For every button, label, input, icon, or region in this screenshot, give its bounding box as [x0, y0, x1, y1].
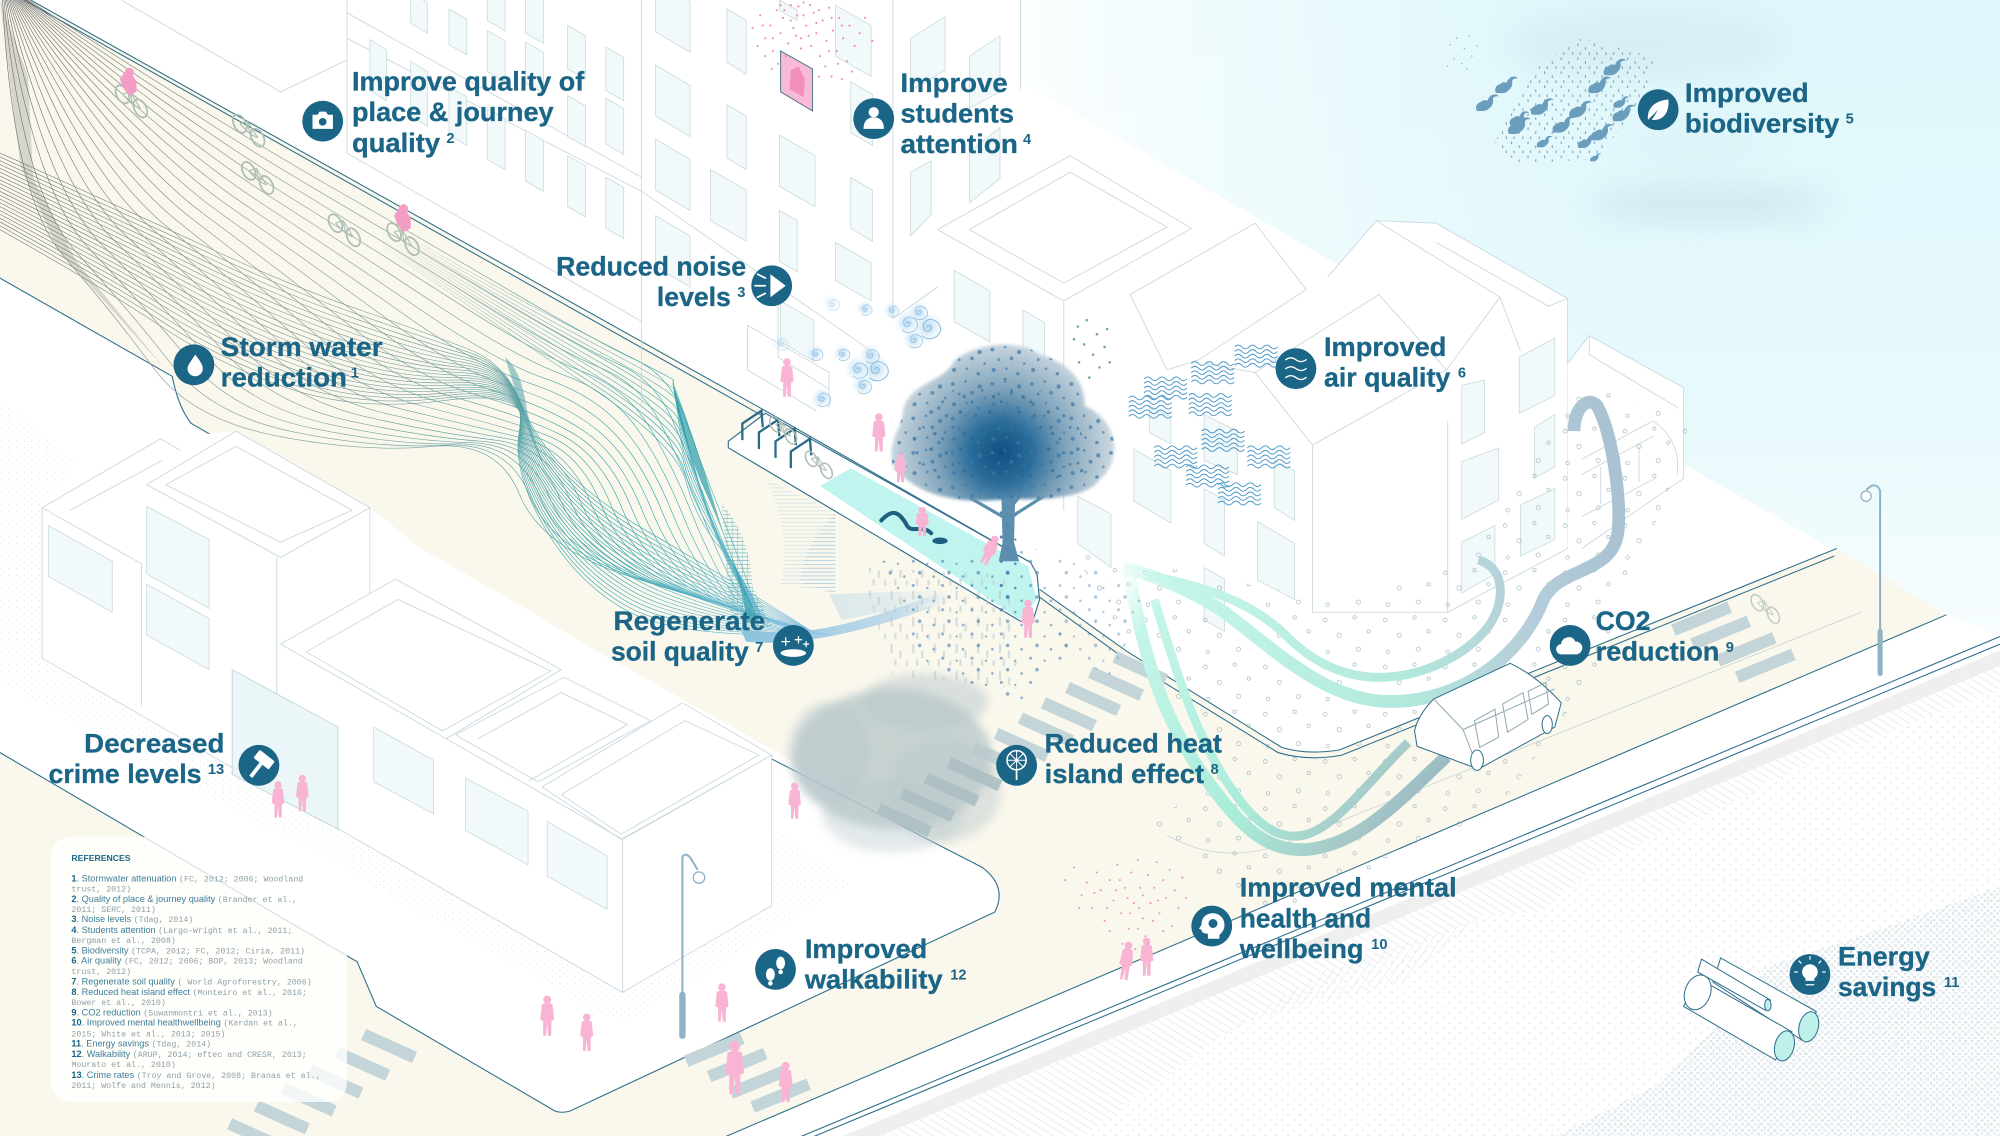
label: regenerate soil quality: 7 — [755, 640, 763, 656]
label: improve quality of place: 2 — [446, 131, 455, 147]
icon: pink student window — [781, 51, 812, 111]
label: decreased crime levels — [48, 729, 279, 789]
tree — [891, 345, 1114, 612]
pedestrian crossings — [203, 607, 1793, 1136]
label: improve students attention: Improve — [901, 68, 1008, 98]
label: improved biodiversity — [1638, 78, 1854, 139]
ring dot scatter around traffic ribbons — [1071, 383, 1696, 912]
label: improved air quality: 6 — [1458, 366, 1466, 382]
tall left building — [121, 0, 1020, 411]
label: regenerate soil quality: Regenerate — [614, 606, 765, 636]
label: storm water reduction: reduction — [221, 362, 347, 392]
label: improve students attention: students — [901, 98, 1014, 128]
reference list: 10. Improved mental healthwellbeing (Kardan et al., — [71, 1018, 298, 1029]
label: regenerate soil quality: soil quality — [611, 637, 749, 667]
label: improved walkability: 12 — [950, 968, 967, 984]
label: reduced heat island effect: island effect — [1045, 759, 1204, 789]
label: storm water reduction — [173, 332, 383, 392]
reference list: 6. Air quality (FC, 2012; 2006; BOP, 2013; Woodland — [71, 956, 303, 967]
label: improved walkability — [755, 934, 967, 995]
ground textures — [0, 398, 2000, 1136]
air quality ribbons — [1122, 402, 1619, 850]
pink people — [272, 358, 1153, 1102]
label: CO2 reduction: CO2 — [1596, 606, 1651, 636]
references panel: REFERENCES — [71, 853, 131, 863]
heat crossing overlay — [879, 763, 1000, 832]
label: improve students attention: 4 — [1023, 132, 1032, 148]
label: reduced heat island effect — [996, 729, 1222, 789]
label: reduced heat island effect: 8 — [1210, 762, 1219, 778]
air quality wave patches — [1129, 345, 1290, 505]
biodiversity birds and particles — [1448, 36, 1656, 163]
reference list: 13. Crime rates (Troy and Grove, 2008; Branas et al., — [71, 1070, 321, 1081]
reference list: 5. Biodiversity (TCPA, 2012; FC, 2012; Ciria, 2011) — [71, 945, 305, 956]
storm water wave lines — [0, 0, 829, 635]
label: reduced noise levels — [556, 252, 792, 312]
heat island shade — [788, 673, 1001, 852]
label: CO2 reduction — [1550, 606, 1734, 667]
reference list: 2011; SERC, 2011) — [71, 905, 156, 915]
noise swirls — [771, 294, 944, 410]
label: improved air quality: Improved — [1324, 332, 1446, 362]
reference list: 3. Noise levels (Tdag, 2014) — [71, 914, 193, 925]
label: improved biodiversity: Improved — [1685, 78, 1809, 108]
reference list: 2015; White et al., 2013; 2015) — [71, 1029, 225, 1039]
label: energy savings: savings — [1838, 972, 1936, 1002]
label: improved mental health and wellbeing: Improved mental — [1240, 873, 1457, 903]
cyclists — [113, 68, 1782, 626]
reference list: 12. Walkability (ARUP, 2014; eftec and CRESR, 2013; — [71, 1049, 307, 1060]
label: reduced heat island effect: Reduced heat — [1045, 729, 1222, 759]
reference list: trust, 2012) — [71, 885, 131, 895]
pink attention dots — [753, 3, 872, 79]
reference list: 2011; Wolfe and Mennis, 2012) — [71, 1081, 216, 1091]
van — [1415, 663, 1561, 770]
label: improved biodiversity: 5 — [1846, 112, 1854, 128]
rear annex — [1568, 335, 1684, 548]
reference list: 8. Reduced heat island effect (Monteiro et al., 2016; — [71, 987, 307, 998]
reference list — [71, 873, 321, 1091]
label: improved mental health and wellbeing: 10 — [1371, 937, 1387, 953]
street lamps — [682, 485, 1880, 1036]
reference list: 4. Students attention (Largo-Wright et al., 2011; — [71, 925, 292, 936]
low left building — [42, 431, 772, 992]
bike racks — [742, 411, 811, 468]
reference list: Mourato et al., 2010) — [71, 1060, 176, 1070]
label: storm water reduction: Storm water — [221, 332, 383, 362]
water snake mark — [881, 513, 931, 533]
windows grid — [370, 0, 1000, 361]
wave folds and blue ribbons — [0, 0, 954, 643]
sky area — [1019, 0, 2000, 644]
reference list: 1. Stormwater attenuation (FC, 2012; 2006; Woodland — [71, 873, 303, 884]
label: regenerate soil quality — [611, 606, 814, 667]
label: improved mental health and wellbeing — [1191, 873, 1457, 964]
label: reduced noise levels: 3 — [737, 285, 745, 301]
label: improved mental health and wellbeing: health and — [1240, 903, 1371, 933]
label: energy savings: 11 — [1944, 975, 1959, 991]
label: improve quality of place — [302, 67, 584, 158]
label: improve students attention — [853, 68, 1032, 159]
reference list: trust, 2012) — [71, 967, 131, 977]
root dashes and dots — [861, 548, 1148, 708]
mental health pink dots — [1065, 860, 1186, 949]
label: improved biodiversity: biodiversity — [1685, 109, 1839, 139]
reference list: 7. Regenerate soil quality ( World Agroforestry, 2006) — [71, 977, 312, 988]
label: improved air quality — [1276, 332, 1466, 392]
right terrace buildings — [938, 156, 1684, 631]
label: storm water reduction: 1 — [351, 366, 359, 382]
label: improved mental health and wellbeing: wellbeing — [1239, 934, 1364, 964]
right building windows — [1023, 310, 1555, 631]
label: improve quality of place: Improve quality of — [352, 67, 584, 97]
label: improve students attention: attention — [901, 129, 1018, 159]
label: improved walkability: walkability — [804, 965, 943, 995]
label: decreased crime levels: Decreased — [84, 729, 224, 759]
reference list: Bower et al., 2010) — [71, 998, 166, 1008]
energy pipes — [1680, 958, 1822, 1063]
reference list: Bergman et al., 2008) — [71, 936, 176, 946]
label: improve quality of place: quality — [352, 128, 440, 158]
label: reduced noise levels: levels — [657, 282, 731, 312]
label: improve quality of place: place & journey — [352, 97, 554, 127]
planter water — [820, 468, 1037, 620]
white sidewalk around low building — [0, 278, 999, 1112]
label: reduced noise levels: Reduced noise — [556, 252, 746, 282]
label: energy savings: Energy — [1838, 942, 1930, 972]
label: CO2 reduction: reduction — [1596, 637, 1719, 667]
label: improved air quality: air quality — [1324, 362, 1450, 392]
label: energy savings — [1790, 942, 1959, 1002]
label: improved walkability: Improved — [805, 934, 927, 964]
reference list: 9. CO2 reduction (Suwanmontri et al., 2013) — [71, 1007, 273, 1018]
storm water fold lines — [383, 222, 765, 625]
reference list: 2. Quality of place & journey quality (Brander et al., — [71, 894, 297, 905]
label: decreased crime levels: 13 — [208, 762, 224, 778]
label: CO2 reduction: 9 — [1726, 640, 1734, 656]
references panel — [51, 837, 347, 1102]
small particle cluster on facade — [1074, 320, 1110, 378]
planter with bike racks — [728, 411, 1040, 621]
label: decreased crime levels: crime levels — [48, 759, 202, 789]
reference list: 11. Energy savings (Tdag, 2014) — [71, 1039, 211, 1050]
